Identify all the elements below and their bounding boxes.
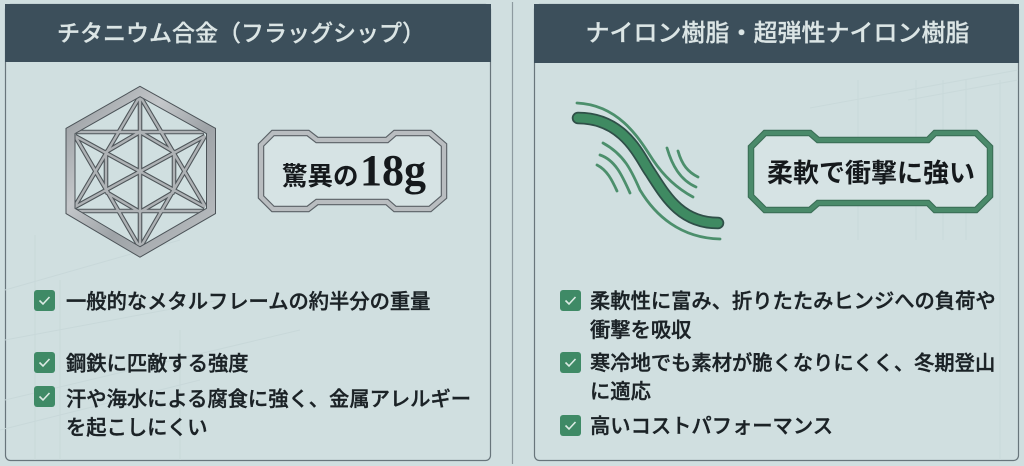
feature: corrosion resistance: を起こしにくい <box>66 416 208 440</box>
feature: flexibility: 柔軟性に富み、折りたたみヒンジへの負荷や <box>590 290 996 313</box>
callout: 18g <box>261 133 444 209</box>
callout: flexible and impact resistant <box>751 133 990 210</box>
feature: flexibility: 衝撃を吸収 <box>590 319 691 342</box>
callout: flexible and impact resistant: 柔軟で衝撃に強い <box>767 158 975 188</box>
feature: cold resistance <box>560 352 995 404</box>
feature: cold resistance: 寒冷地でも素材が脆くなりにくく、冬期登山 <box>590 352 995 375</box>
feature: flexibility <box>560 290 996 342</box>
panel header: titanium <box>5 4 491 62</box>
icon: flexible wave <box>577 103 720 239</box>
feature: corrosion resistance <box>34 386 471 440</box>
panel header: titanium: チタニウム合金（フラッグシップ） <box>57 20 425 46</box>
callout: 18g: 驚異の <box>282 163 359 191</box>
feature: strength: 鋼鉄に匹敵する強度 <box>66 352 249 376</box>
callout: 18g: 18g <box>360 146 426 195</box>
panel header: nylon: ナイロン樹脂・超弾性ナイロン樹脂 <box>586 20 970 47</box>
feature: cost performance: 高いコストパフォーマンス <box>590 415 833 438</box>
divider <box>512 2 514 464</box>
feature: cold resistance: に適応 <box>590 380 651 404</box>
panel: nylon resin <box>534 4 1019 460</box>
panel header: nylon <box>534 4 1019 63</box>
feature: weight: 一般的なメタルフレームの約半分の重量 <box>66 290 430 314</box>
feature: corrosion resistance: 汗や海水による腐食に強く、金属アレルギー <box>66 388 471 411</box>
icon: titanium hexagon lattice <box>70 92 211 252</box>
panel: titanium alloy <box>0 4 491 460</box>
